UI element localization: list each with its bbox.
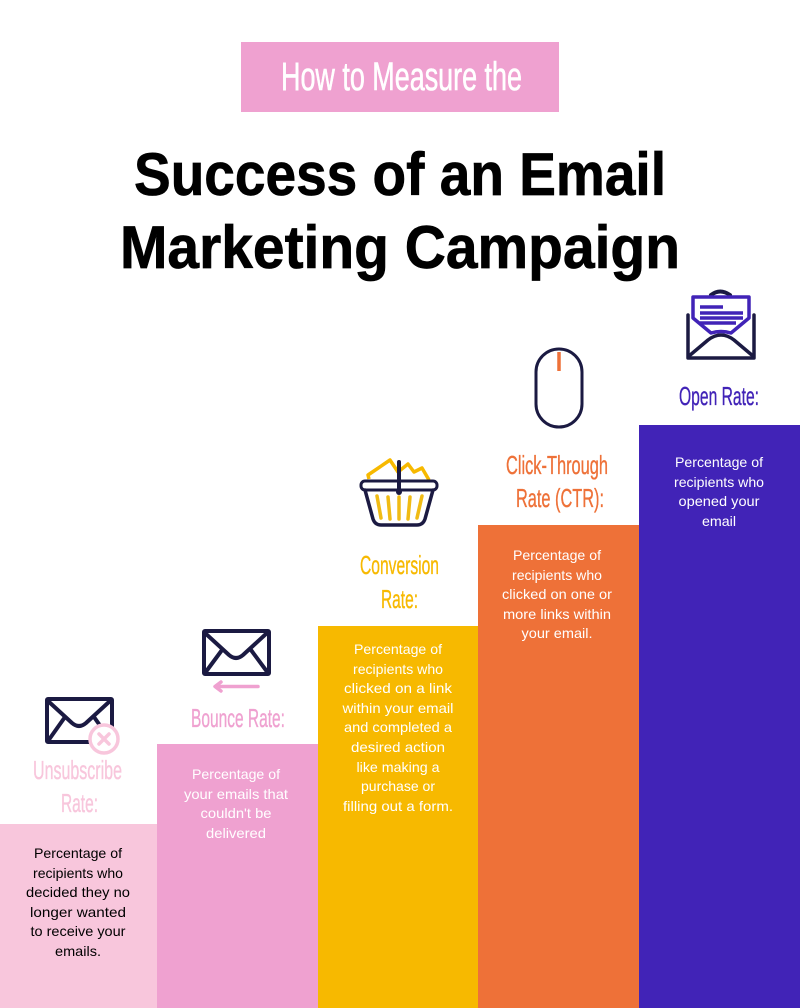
open rate description: recipients who <box>674 474 764 490</box>
bounce description: Percentage of <box>192 766 280 782</box>
panel: open rate <box>639 425 800 1008</box>
label: unsubscribe rate <box>33 755 122 818</box>
label: click-through rate: Click-Through <box>506 450 608 480</box>
click-through description: more links within <box>503 606 611 622</box>
label: conversion rate <box>360 550 439 614</box>
main heading: Success of an Email <box>134 141 666 208</box>
open rate description: Percentage of <box>675 454 763 470</box>
panel: conversion rate <box>318 626 478 1008</box>
click-through description <box>502 547 612 641</box>
icon: envelope with back arrow <box>204 631 269 691</box>
unsubscribe description: decided they no <box>26 884 130 900</box>
title banner: How to Measure the <box>281 55 522 99</box>
bounce description: delivered <box>206 825 266 841</box>
open rate description <box>674 454 764 529</box>
main heading <box>120 141 680 281</box>
open rate description: opened your <box>678 493 760 509</box>
bounce description: your emails that <box>184 786 288 802</box>
unsubscribe description: recipients who <box>33 865 123 881</box>
conversion description: desired action <box>351 739 445 755</box>
conversion description: recipients who <box>353 661 443 677</box>
title banner <box>241 42 559 112</box>
label: conversion rate: Conversion <box>360 550 439 580</box>
label: bounce rate: Bounce Rate: <box>191 703 285 733</box>
conversion description: clicked on a link <box>344 680 453 696</box>
label: unsubscribe rate: Unsubscribe <box>33 755 122 785</box>
label: click-through rate <box>506 450 608 513</box>
click-through description: Percentage of <box>513 547 601 563</box>
label: unsubscribe rate: Rate: <box>61 788 98 818</box>
main heading: Marketing Campaign <box>120 214 680 281</box>
click-through description: recipients who <box>512 567 602 583</box>
panel: bounce rate <box>157 744 318 1008</box>
icon: open envelope with letter <box>688 292 754 358</box>
bounce description: couldn't be <box>200 805 272 821</box>
icon: computer mouse <box>536 349 582 427</box>
label: conversion rate: Rate: <box>381 584 418 614</box>
open rate description: email <box>702 513 736 529</box>
conversion description: filling out a form. <box>343 798 453 814</box>
unsubscribe description: to receive your <box>30 923 126 939</box>
bounce description <box>184 766 288 841</box>
conversion description: like making a <box>356 759 440 775</box>
unsubscribe description: longer wanted <box>30 904 126 920</box>
panel: click-through rate <box>478 525 639 1008</box>
unsubscribe description <box>26 845 130 959</box>
conversion description: and completed a <box>344 719 452 735</box>
icon: envelope with x <box>47 699 118 753</box>
click-through description: clicked on one or <box>502 586 612 602</box>
icon: shopping basket <box>361 460 437 525</box>
panel: unsubscribe rate <box>0 824 157 1008</box>
conversion description: purchase or <box>361 778 435 794</box>
conversion description: within your email <box>341 700 454 716</box>
label: click-through rate: Rate (CTR): <box>516 483 604 513</box>
unsubscribe description: Percentage of <box>34 845 122 861</box>
conversion description: Percentage of <box>354 641 442 657</box>
conversion description <box>341 641 454 814</box>
unsubscribe description: emails. <box>55 943 101 959</box>
click-through description: your email. <box>522 625 592 641</box>
